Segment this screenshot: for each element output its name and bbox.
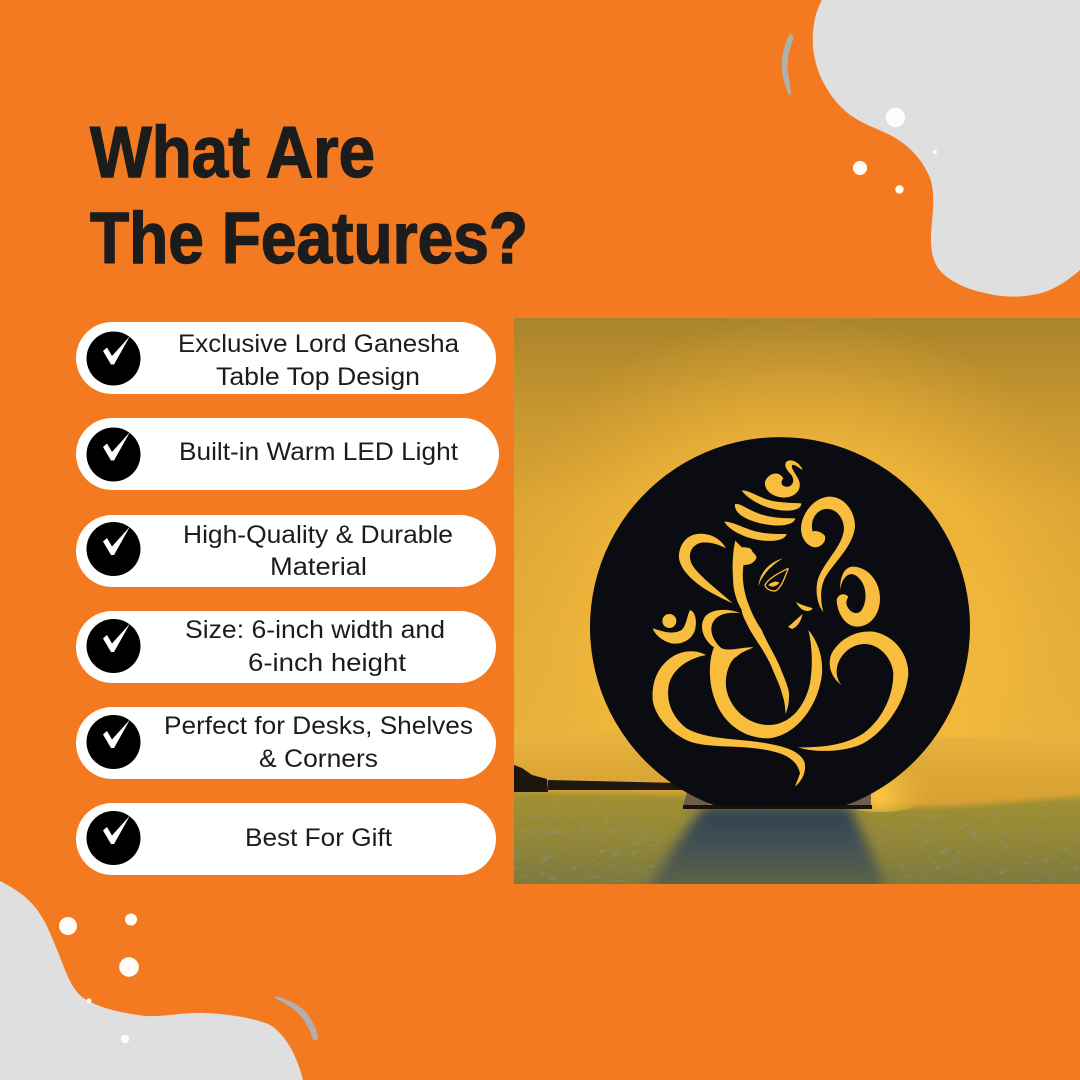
ganesha cutout: [653, 460, 908, 787]
feature pill: placement: & Corners: [259, 745, 378, 773]
lamp stand: [683, 792, 872, 809]
shadow under lamp: [645, 806, 888, 892]
crown stripes: [742, 490, 801, 511]
tusk: [788, 614, 802, 629]
right om curve: [798, 631, 908, 751]
feature pill: gift: Best For Gift: [245, 824, 392, 852]
title: [90, 113, 528, 279]
topknot: [765, 460, 803, 498]
feature pill: placement: [76, 707, 496, 779]
icon: grey swoosh bottom: [275, 996, 318, 1040]
title: The Features?: [90, 199, 528, 279]
icon: grey swoosh top: [782, 34, 794, 95]
forehead and trunk: [733, 541, 789, 714]
lamp disc: [590, 437, 970, 806]
feature pill: Ganesha design: Exclusive Lord Ganesha: [178, 330, 459, 358]
feature pill: Ganesha design: [76, 322, 496, 394]
product photo: Ganesha LED lamp: [500, 318, 1080, 900]
upper cutouts: [679, 460, 880, 627]
feature pill: Ganesha design: Table Top Design: [216, 363, 420, 391]
feature pill: material: Material: [270, 553, 367, 581]
right ear: [801, 497, 855, 612]
feature pill: size: 6-inch height: [248, 649, 406, 677]
small om symbol: [662, 614, 676, 628]
decorative blob: top right: [782, 0, 1080, 297]
power cable: [514, 765, 682, 792]
table surface: [514, 735, 1080, 810]
wall: [514, 318, 1080, 748]
feature pill: size: [76, 611, 496, 683]
feature pill: material: [76, 515, 496, 587]
warm spot beside stand: [854, 774, 918, 812]
feature pill: size: Size: 6-inch width and: [185, 616, 445, 644]
title: What Are: [90, 113, 375, 193]
feature pill: LED light: [76, 418, 499, 490]
right small loop: [837, 567, 880, 627]
feature pill: LED light: Built-in Warm LED Light: [179, 438, 458, 466]
lower cutouts: [653, 610, 908, 787]
belly curve: [702, 610, 822, 738]
trunk tip: [796, 602, 813, 611]
lower left curve: [653, 651, 805, 787]
eye: [758, 558, 788, 591]
feature pill: gift: [76, 803, 496, 875]
floor: [514, 790, 1080, 884]
left ear: [679, 534, 733, 603]
decorative blob: bottom left: [0, 881, 318, 1080]
feature pill: material: High-Quality & Durable: [183, 521, 453, 549]
feature pill: placement: Perfect for Desks, Shelves: [164, 712, 473, 740]
